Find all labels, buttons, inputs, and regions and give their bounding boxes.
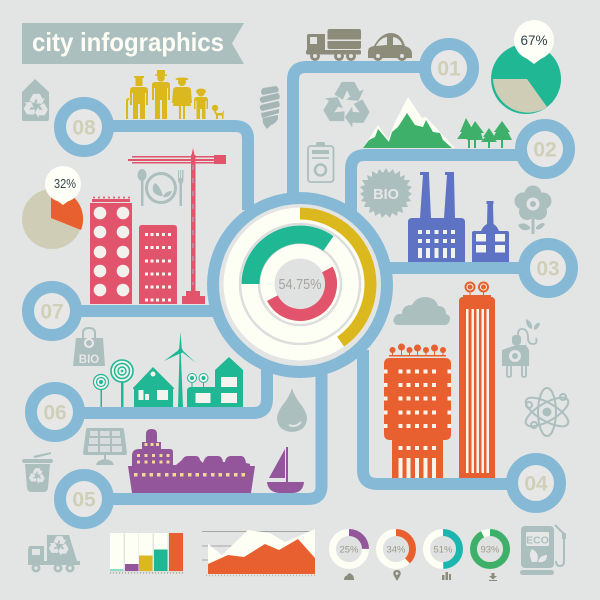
building with round windows xyxy=(90,196,132,304)
node 06: 06 xyxy=(43,402,67,424)
donut 51% xyxy=(426,532,460,566)
icon: recycling tag xyxy=(21,79,50,121)
central ring chart xyxy=(213,198,387,372)
node 07 xyxy=(28,287,76,335)
icon: download xyxy=(489,573,497,581)
node 05 xyxy=(60,475,108,523)
icon: plate with leaves xyxy=(138,169,184,206)
tower crane xyxy=(128,148,226,304)
node 04: 04 xyxy=(524,472,548,496)
icon: recycling truck xyxy=(28,535,80,572)
icon: flower xyxy=(514,186,552,234)
wind turbine xyxy=(164,332,196,407)
small factory xyxy=(472,201,509,262)
icon: eco fuel pump xyxy=(520,525,566,575)
house with side wing xyxy=(187,357,243,407)
node 07: 07 xyxy=(40,300,64,324)
icon: solar panel xyxy=(83,428,127,465)
icon: eco plug xyxy=(502,319,540,377)
icon: battery xyxy=(308,142,334,182)
donut 25%: 25% xyxy=(339,544,359,556)
number circles xyxy=(28,44,572,523)
icon: water drop xyxy=(277,388,307,432)
pie chart 32%: 32% xyxy=(54,176,76,191)
icon: light bulb xyxy=(260,86,280,129)
icon: small cloud xyxy=(344,573,354,580)
figure with cane xyxy=(126,76,148,119)
cloud xyxy=(393,297,450,325)
building with square windows xyxy=(139,225,177,304)
donut 25% xyxy=(332,532,366,566)
node 01: 01 xyxy=(437,58,461,80)
icon: BIO badge xyxy=(360,168,412,218)
icon: atom xyxy=(522,388,572,436)
icon: recycling symbol xyxy=(319,82,373,131)
node 05: 05 xyxy=(72,488,96,512)
bar chart xyxy=(110,533,184,573)
node 03 xyxy=(524,244,572,292)
donut 34% xyxy=(380,532,412,566)
donut 93%: 93% xyxy=(480,544,500,556)
icon: eco fuel pump: ECO xyxy=(526,534,549,546)
node 04 xyxy=(512,459,560,507)
donut 34%: 34% xyxy=(386,544,406,556)
dog xyxy=(212,105,224,119)
child xyxy=(194,88,208,119)
node 08 xyxy=(60,103,108,151)
pine trees xyxy=(457,118,512,148)
house xyxy=(133,367,174,407)
orange tower xyxy=(384,344,451,478)
woman with hat xyxy=(172,78,192,119)
vehicles: truck xyxy=(306,29,361,61)
icon: BIO shopping bag xyxy=(73,328,105,366)
icon: recycling bin xyxy=(22,452,53,492)
title banner xyxy=(22,23,244,64)
cargo ship xyxy=(128,429,255,493)
icon: BIO shopping bag: BIO xyxy=(79,354,99,366)
node 06 xyxy=(31,388,79,436)
pie chart 32% xyxy=(22,166,83,249)
donut 51%: 51% xyxy=(433,544,453,556)
lollipop trees xyxy=(94,360,133,407)
node 03: 03 xyxy=(536,258,560,280)
large factory xyxy=(408,172,465,262)
node 01 xyxy=(425,44,473,92)
tall striped tower xyxy=(459,282,495,478)
title banner: city infographics xyxy=(32,27,224,57)
donut 93% xyxy=(474,532,506,566)
icon: BIO badge: BIO xyxy=(373,187,399,203)
node 02: 02 xyxy=(533,138,557,162)
icon: small bars xyxy=(442,572,451,580)
mountains xyxy=(363,97,455,148)
central ring chart: 54.75% xyxy=(278,276,322,293)
icon: map pin xyxy=(393,570,401,581)
node 02 xyxy=(521,125,569,173)
67% pie chart: 67% xyxy=(520,32,548,48)
vehicles: car xyxy=(368,33,412,61)
family figures xyxy=(126,70,224,119)
pipes network xyxy=(52,67,548,499)
figure with top hat xyxy=(152,70,170,119)
node 08: 08 xyxy=(72,116,96,140)
67% pie chart xyxy=(491,20,561,114)
area chart xyxy=(202,529,315,576)
sailboat xyxy=(267,447,304,493)
